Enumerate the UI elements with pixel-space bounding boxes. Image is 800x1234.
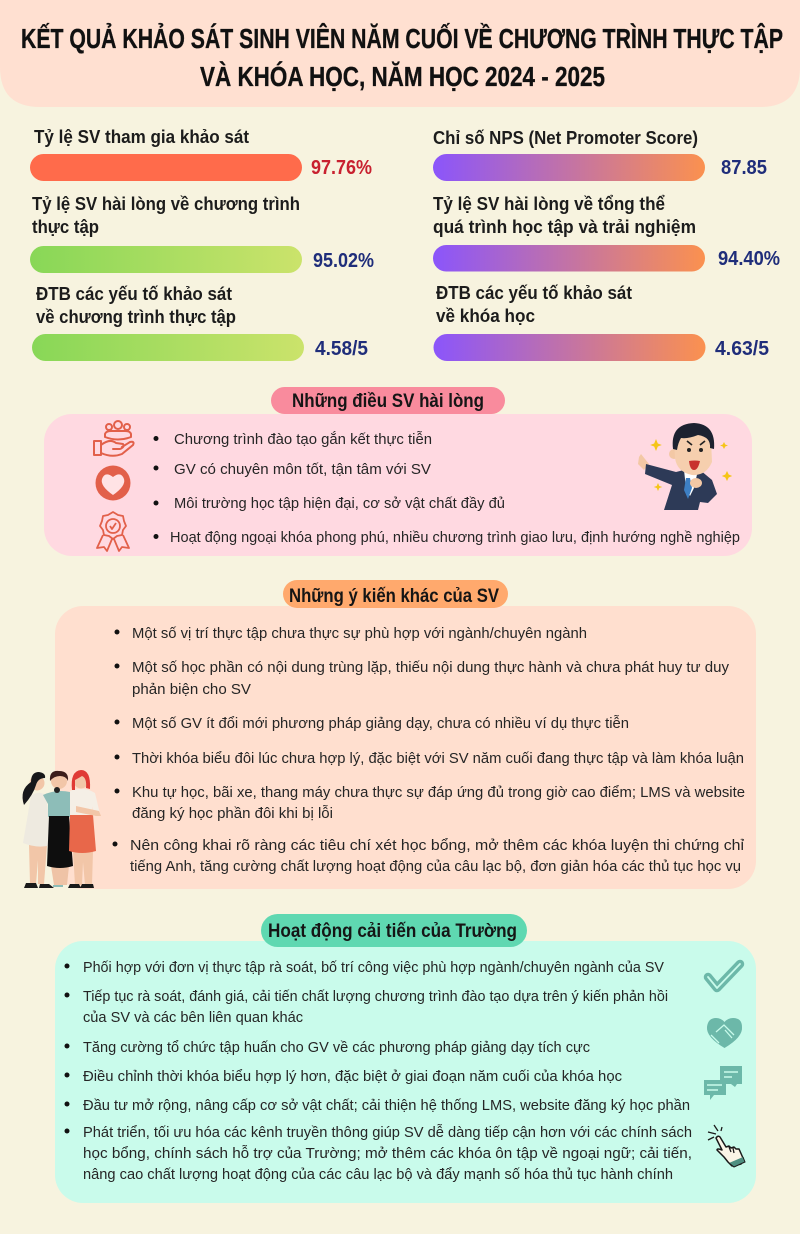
metric: internship average score xyxy=(32,283,368,361)
list: improvement actions: nâng cao chất lượng hoạt động của các câu lạc bộ và đẩy mạnh số hóa thủ tục hành chính xyxy=(83,1166,673,1183)
list: satisfied points: Hoạt động ngoại khóa phong phú, nhiều chương trình giao lưu, định hướng nghề nghiệp xyxy=(170,529,740,546)
list: satisfied points: GV có chuyên môn tốt, tận tâm với SV xyxy=(174,461,431,478)
icon: check mark xyxy=(708,964,740,988)
list: other opinions: Một số học phần có nội dung trùng lặp, thiếu nội dung thực hành và chưa phát huy tư duy xyxy=(132,659,729,676)
title banner: VÀ KHÓA HỌC, NĂM HỌC 2024 - 2025 xyxy=(200,61,605,92)
list: improvement actions: Điều chỉnh thời khóa biểu hợp lý hơn, đặc biệt ở giai đoạn năm cuối của khóa học xyxy=(83,1068,622,1085)
heading: improvement actions xyxy=(261,914,527,947)
metric: internship average score: 4.58/5 xyxy=(315,338,368,360)
metric: NPS: 87.85 xyxy=(721,157,767,179)
list: improvement actions: Tăng cường tổ chức tập huấn cho GV về các phương pháp giảng dạy tích cực xyxy=(83,1039,590,1056)
metric: internship satisfaction xyxy=(30,193,374,273)
heading: improvement actions: Hoạt động cải tiến của Trường xyxy=(268,921,517,942)
icon: heart in circle xyxy=(96,466,130,500)
illustration: man in suit xyxy=(638,423,732,510)
metric: internship satisfaction: 95.02% xyxy=(313,250,374,272)
list: other opinions: tiếng Anh, tăng cường chất lượng hoạt động của câu lạc bộ, đơn giản hóa các thủ tục học vụ xyxy=(130,858,741,875)
list: improvement actions: học bổng, chính sách hỗ trợ của Trường; mở thêm các khóa ôn tập về ngoại ngữ; cải tiến, xyxy=(83,1145,692,1162)
list: improvement actions: Phát triển, tối ưu hóa các kênh truyền thông giúp SV dễ dàng tiếp cận hơn với các chính sách xyxy=(83,1124,692,1141)
list: improvement actions: của SV và các bên liên quan khác xyxy=(83,1009,303,1026)
metric: participation rate xyxy=(30,126,372,181)
title banner xyxy=(0,0,800,107)
metric: internship average score: ĐTB các yếu tố khảo sát xyxy=(36,283,232,304)
metric: participation rate: Tỷ lệ SV tham gia khảo sát xyxy=(34,126,249,147)
list: other opinions: Khu tự học, bãi xe, thang máy chưa thực sự đáp ứng đủ trong giờ cao điểm; LMS và website xyxy=(132,784,745,801)
list: satisfied points xyxy=(154,431,740,546)
panel: improvement actions xyxy=(55,914,756,1203)
list: other opinions: Một số GV ít đổi mới phương pháp giảng dạy, chưa có nhiều ví dụ thực tiễn xyxy=(132,715,629,732)
list: satisfied points: Môi trường học tập hiện đại, cơ sở vật chất đầy đủ xyxy=(174,495,505,512)
metric: overall satisfaction: Tỷ lệ SV hài lòng về tổng thể xyxy=(433,193,665,214)
list: other opinions: đăng ký học phần đôi khi bị lỗi xyxy=(132,805,333,822)
metric: course average score: ĐTB các yếu tố khảo sát xyxy=(436,282,632,303)
metric: course average score: về khóa học xyxy=(436,305,535,326)
heading: other opinions xyxy=(283,580,508,608)
metric: overall satisfaction: quá trình học tập và trải nghiệm xyxy=(433,216,696,237)
metric: course average score xyxy=(434,282,769,361)
icon: clicking hand xyxy=(708,1125,745,1167)
heading: other opinions: Những ý kiến khác của SV xyxy=(289,586,499,607)
metric: overall satisfaction xyxy=(433,193,780,272)
illustration: three students xyxy=(23,770,101,888)
metric: internship satisfaction: Tỷ lệ SV hài lòng về chương trình xyxy=(32,193,300,214)
panel: satisfied points xyxy=(44,387,752,556)
panel: other opinions xyxy=(55,580,756,889)
list: other opinions: Nên công khai rõ ràng các tiêu chí xét học bổng, mở thêm các khóa luyện thi chứng chỉ xyxy=(130,837,745,854)
list: satisfied points: Chương trình đào tạo gắn kết thực tiễn xyxy=(174,431,432,448)
metric: course average score: 4.63/5 xyxy=(715,338,769,360)
list: improvement actions xyxy=(64,959,692,1183)
metric: internship average score: về chương trình thực tập xyxy=(36,306,236,327)
list: improvement actions: Phối hợp với đơn vị thực tập rà soát, bố trí công việc phù hợp ngành/chuyên ngành của SV xyxy=(83,959,664,976)
list: other opinions: Thời khóa biểu đôi lúc chưa hợp lý, đặc biệt với SV năm cuối đang thực tập và làm khóa luận xyxy=(132,750,744,767)
list: other opinions: Một số vị trí thực tập chưa thực sự phù hợp với ngành/chuyên ngành xyxy=(132,625,587,642)
list: other opinions: phản biện cho SV xyxy=(132,681,251,698)
metric: NPS xyxy=(433,127,767,181)
icon: hand with people xyxy=(94,421,134,456)
metric: overall satisfaction: 94.40% xyxy=(718,248,780,270)
metric: participation rate: 97.76% xyxy=(311,157,372,179)
metric: NPS: Chỉ số NPS (Net Promoter Score) xyxy=(433,127,698,148)
list: other opinions xyxy=(112,625,745,875)
icon: speech bubbles xyxy=(704,1066,742,1100)
icon: heart handshake xyxy=(707,1018,742,1048)
list: improvement actions: Đầu tư mở rộng, nâng cấp cơ sở vật chất; cải thiện hệ thống LMS, website đăng ký học phần xyxy=(83,1097,690,1114)
metric: internship satisfaction: thực tập xyxy=(32,216,99,237)
icon: award ribbon xyxy=(97,512,129,551)
list: improvement actions: Tiếp tục rà soát, đánh giá, cải tiến chất lượng chương trình đào tạo dựa trên ý kiến phản hồi xyxy=(83,988,668,1005)
heading: satisfied points: Những điều SV hài lòng xyxy=(292,391,484,412)
